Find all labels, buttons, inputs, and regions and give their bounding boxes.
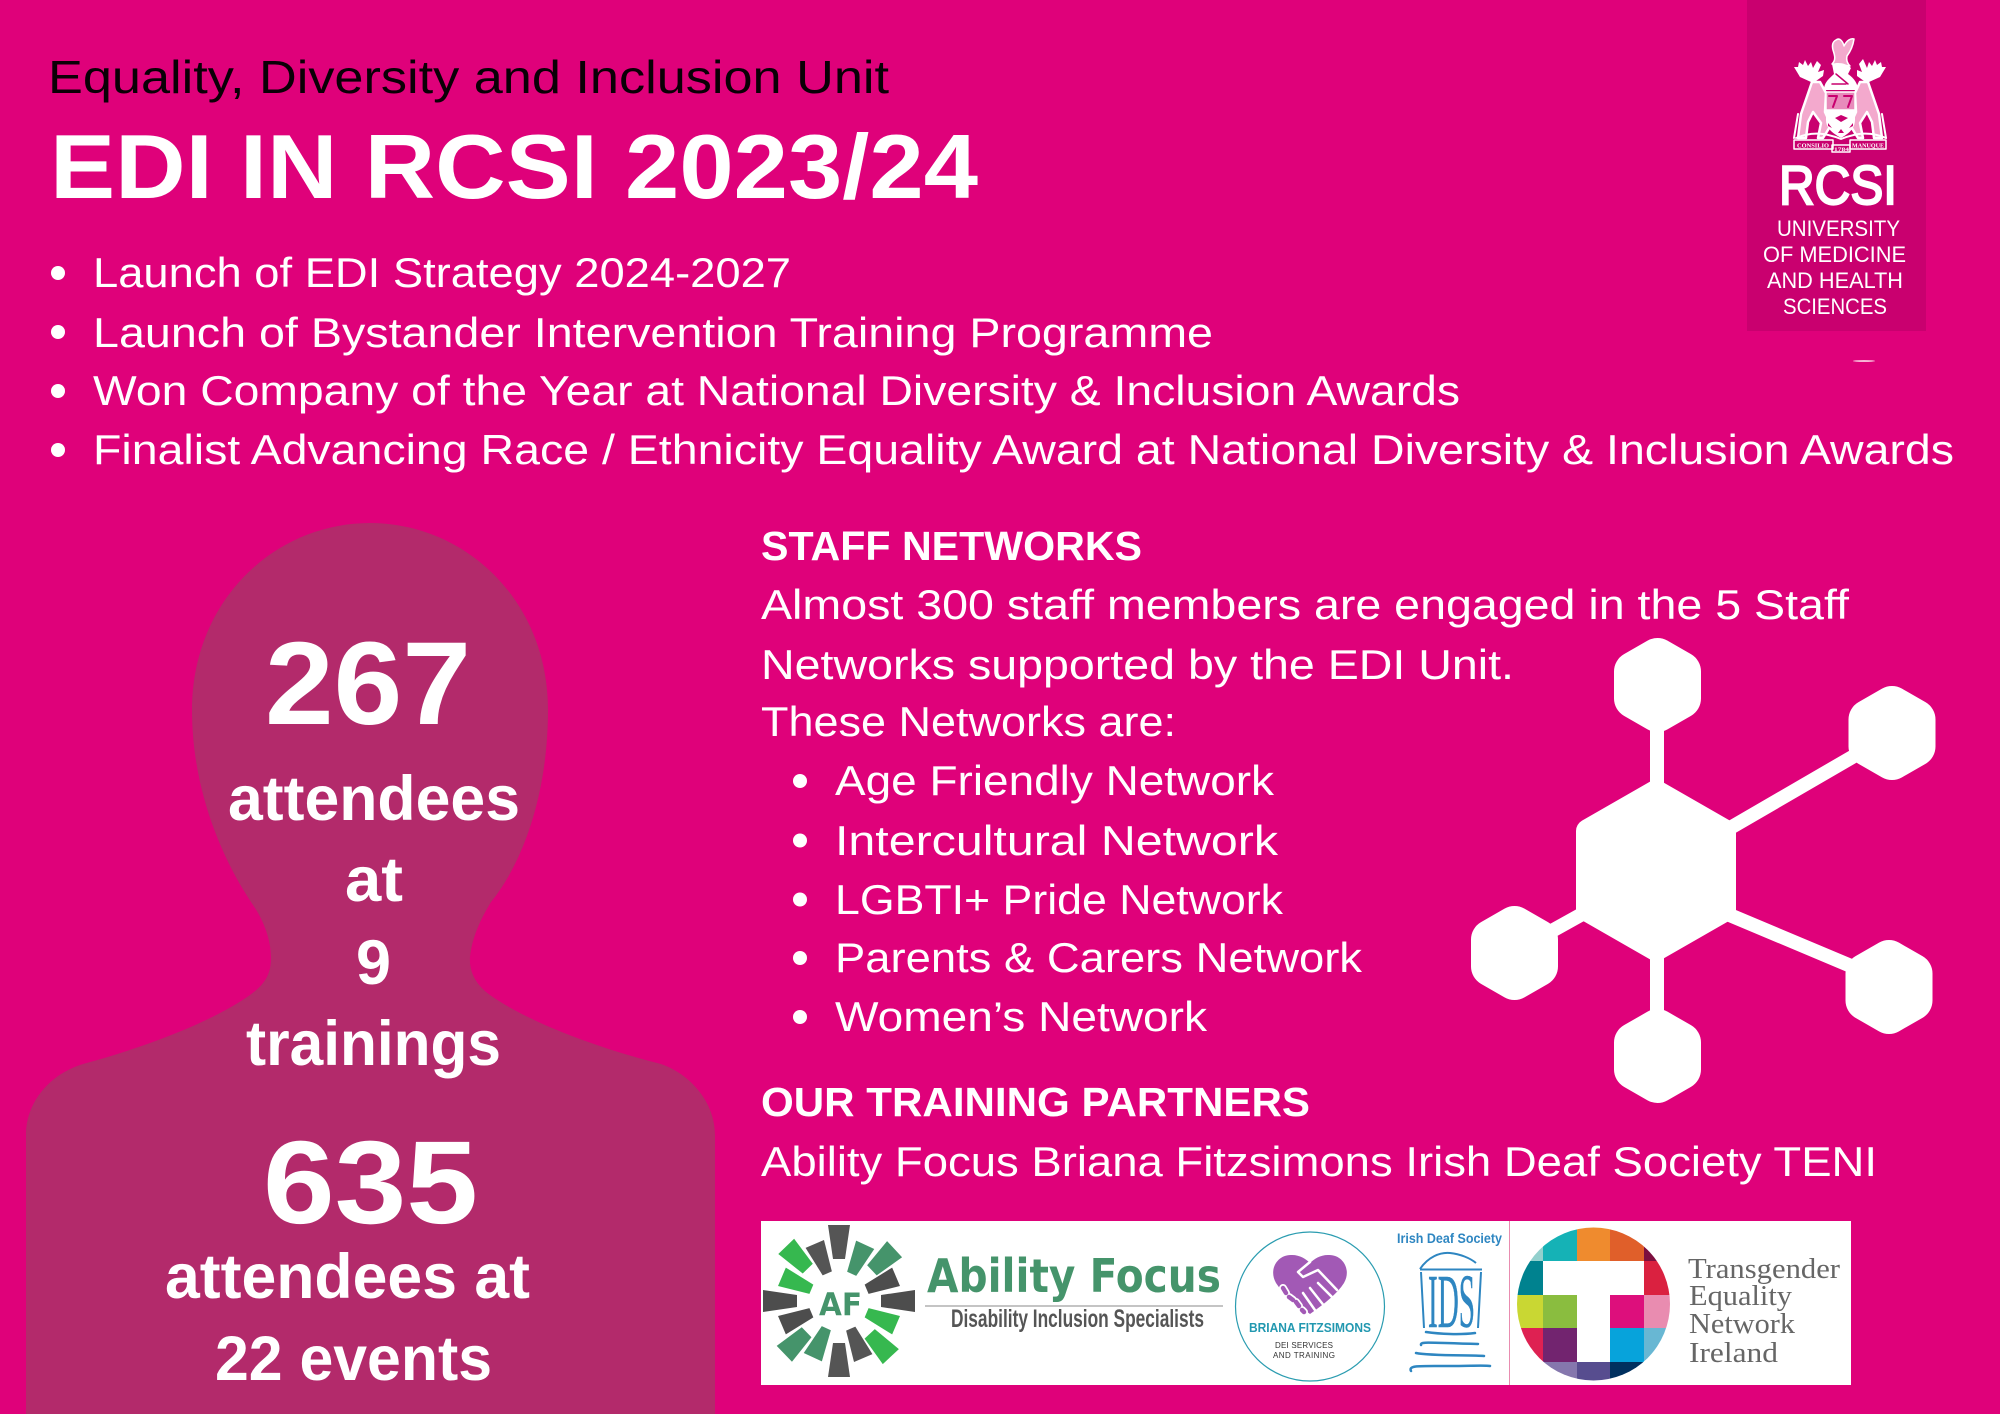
stat: events: 635 [263, 1117, 478, 1249]
logo: TENI wordmark: Transgender [1688, 1253, 1840, 1285]
achievements bullet list: Launch of Bystander Intervention Training Programme [93, 309, 1213, 356]
logo: TENI colour grid [1517, 1227, 1671, 1382]
crest motto [1797, 142, 1884, 153]
crest motto: MANUQUE [1852, 142, 1884, 150]
silhouette panel: person [26, 523, 715, 1414]
achievements bullet list: Launch of EDI Strategy 2024-2027 [93, 249, 791, 296]
logo: TENI wordmark [1688, 1253, 1840, 1369]
achievements bullet list: Finalist Advancing Race / Ethnicity Equality Award at National Diversity & Inclusion Awards [93, 426, 1954, 473]
stat: trainings [228, 618, 520, 1079]
panel: partner logos [761, 1221, 1851, 1385]
RCSI logo panel [1747, 0, 1926, 331]
networks list: Parents & Carers Network [835, 934, 1363, 981]
logo: Briana Fitzsimons: AND TRAINING [1273, 1351, 1335, 1360]
stat: events [165, 1117, 530, 1394]
staff networks description: These Networks are: [761, 698, 1176, 745]
crest motto: CONSILIO [1797, 142, 1829, 150]
stat: trainings: trainings [246, 1009, 501, 1079]
logo: Ability Focus wordmark [925, 1249, 1223, 1333]
stat: trainings: 9 [356, 928, 391, 998]
stat: trainings: at [345, 845, 403, 915]
title: EDI IN RCSI 2023/24 [50, 117, 978, 218]
crest motto: 1784 [1834, 147, 1849, 153]
logo: TENI wordmark: Equality [1689, 1280, 1793, 1312]
achievements bullet list [51, 249, 1954, 473]
staff networks description: Networks supported by the EDI Unit. [761, 641, 1514, 688]
university name: AND HEALTH [1767, 268, 1903, 293]
university name [1763, 216, 1906, 319]
logo: Briana Fitzsimons: BRIANA FITZSIMONS [1249, 1320, 1371, 1335]
logo: Irish Deaf Society: IDS [1428, 1260, 1475, 1344]
subtitle: Equality, Diversity and Inclusion Unit [48, 51, 889, 103]
icon: RCSI crest [1794, 39, 1886, 152]
networks list: Age Friendly Network [835, 757, 1275, 804]
heading: our training partners: OUR TRAINING PARTNERS [761, 1079, 1310, 1125]
stat: events: attendees at [165, 1242, 530, 1312]
icon: Ability Focus sunburst [763, 1225, 915, 1377]
icon: network hub [1491, 658, 1916, 1083]
RCSI wordmark: RCSI [1779, 154, 1897, 216]
networks list: LGBTI+ Pride Network [835, 876, 1284, 923]
university name: SCIENCES [1783, 294, 1887, 319]
staff networks description: Almost 300 staff members are engaged in the 5 Staff [761, 581, 1849, 628]
stat: trainings: 267 [265, 618, 471, 750]
icon: Ability Focus sunburst: AF [819, 1287, 862, 1323]
staff networks description [761, 581, 1849, 745]
logo: Ability Focus wordmark: Ability Focus [927, 1249, 1221, 1303]
university name: OF MEDICINE [1763, 242, 1906, 267]
logo: Irish Deaf Society [1397, 1230, 1502, 1371]
training partner names: Ability Focus Briana Fitzsimons Irish Deaf Society TENI [761, 1138, 1877, 1185]
logo: Irish Deaf Society: Irish Deaf Society [1397, 1230, 1502, 1246]
logo: Ability Focus wordmark: Disability Inclusion Specialists [951, 1305, 1204, 1333]
networks list [793, 757, 1363, 1040]
heading: staff networks: STAFF NETWORKS [761, 523, 1142, 569]
networks list: Intercultural Network [835, 817, 1279, 864]
stat: events: 22 events [215, 1324, 492, 1394]
stat: trainings: attendees [228, 764, 520, 834]
logo: Briana Fitzsimons: DEI SERVICES [1275, 1341, 1333, 1350]
logo: TENI wordmark: Ireland [1689, 1337, 1779, 1369]
logo: Briana Fitzsimons [1236, 1232, 1384, 1381]
university name: UNIVERSITY [1777, 216, 1900, 241]
networks list: Women’s Network [835, 993, 1208, 1040]
logo: TENI wordmark: Network [1689, 1308, 1796, 1340]
achievements bullet list: Won Company of the Year at National Diversity & Inclusion Awards [93, 367, 1460, 414]
